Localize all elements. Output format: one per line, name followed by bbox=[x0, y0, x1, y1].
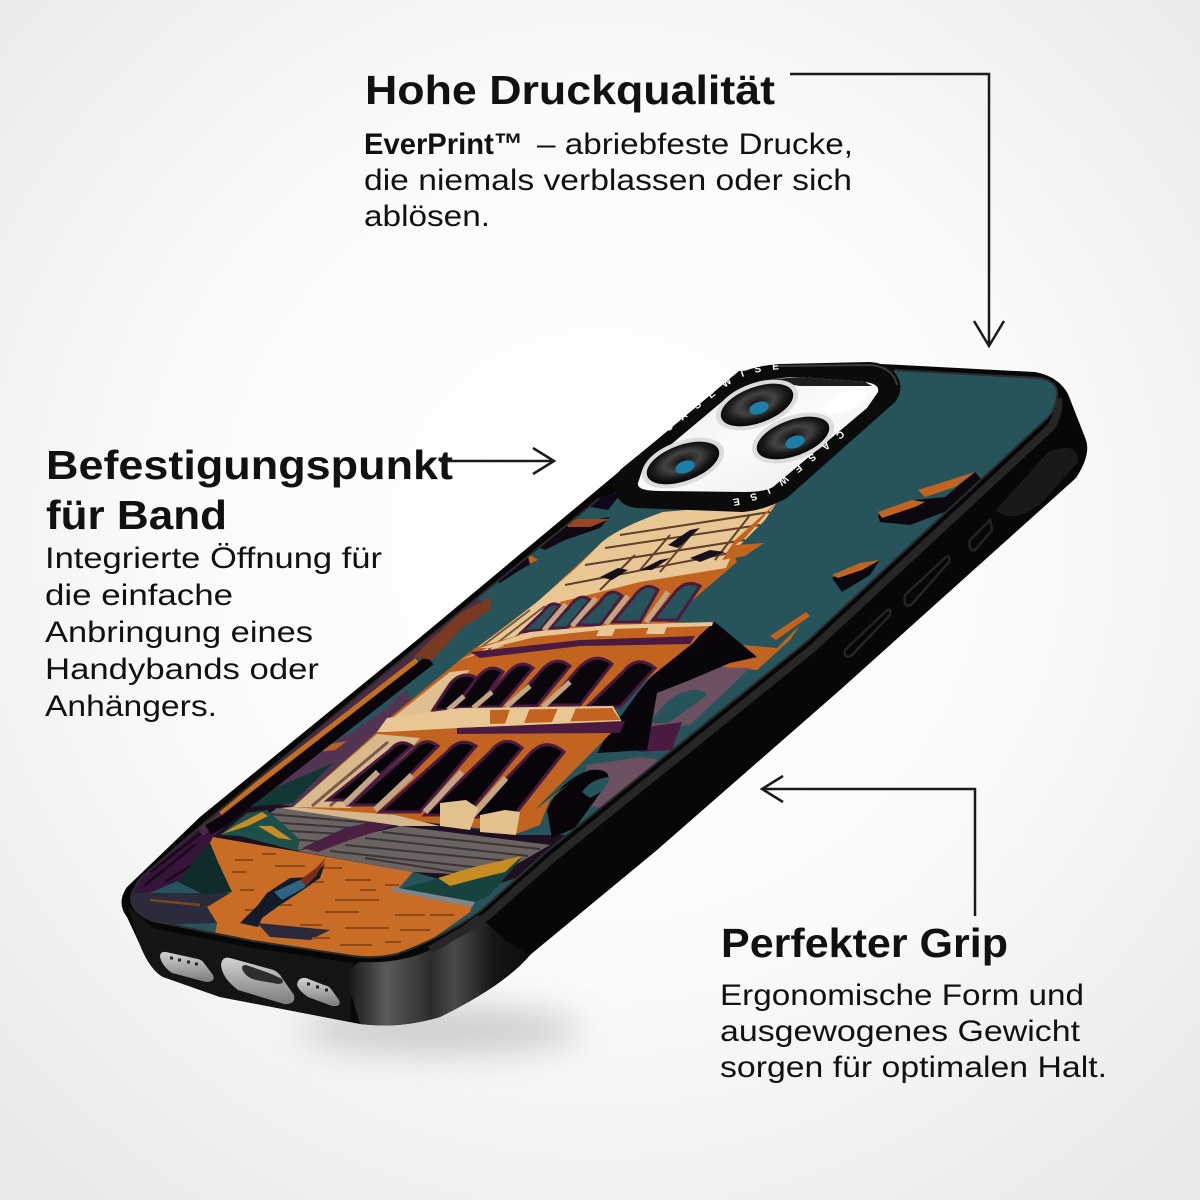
orange rods bbox=[770, 612, 810, 640]
tier four left tan wall bbox=[293, 734, 420, 808]
haze teal stripe bbox=[347, 700, 393, 733]
tier two tan columns bbox=[544, 592, 668, 630]
screen rim bbox=[132, 371, 1056, 956]
left planter bbox=[220, 810, 300, 851]
charging port opening bbox=[242, 965, 283, 984]
arrow: to grip edge bbox=[762, 776, 975, 916]
arrow: to attachment point bbox=[440, 448, 554, 474]
tier four left brown stripes bbox=[312, 742, 410, 806]
figure shadow bbox=[257, 923, 330, 940]
description: Handybands oder bbox=[45, 653, 319, 686]
description bbox=[364, 128, 853, 233]
left purple corner bbox=[132, 821, 232, 900]
dark foliage right bbox=[597, 622, 757, 753]
lens top bbox=[709, 370, 805, 440]
planter curb bbox=[392, 887, 475, 907]
upper ruin opening bbox=[650, 690, 706, 723]
brick lines bbox=[232, 854, 454, 945]
tier three columns bbox=[448, 682, 570, 710]
ground bbox=[207, 837, 473, 962]
band three tan blocks bbox=[505, 708, 576, 724]
case glossy corner bbox=[349, 915, 530, 1025]
heading: für Band bbox=[46, 492, 227, 538]
purple corner stripes bbox=[144, 814, 218, 886]
tier two left columns bbox=[472, 606, 555, 654]
lens left bbox=[635, 428, 731, 498]
callout: grip bbox=[720, 920, 1107, 1084]
tier four bases bbox=[440, 800, 520, 835]
ring wordmark lower: CASEWISE bbox=[732, 432, 844, 506]
speaker left holes bbox=[170, 958, 198, 964]
printed artwork: Colosseum bbox=[120, 360, 1080, 980]
description: Anbringung eines bbox=[45, 616, 313, 649]
description: die niemals verblassen oder sich bbox=[364, 164, 852, 197]
speaker right bbox=[297, 978, 340, 1006]
left pillar top bbox=[413, 597, 491, 660]
description: Anhängers. bbox=[45, 690, 217, 723]
description: EverPrint™ bbox=[364, 128, 523, 161]
cloud near ring bbox=[580, 487, 620, 510]
tier three plum line bbox=[470, 636, 695, 658]
flash glare bbox=[821, 385, 869, 419]
tier three left tan wall bbox=[390, 670, 470, 720]
case side rim bbox=[430, 398, 1058, 950]
description: die einfache bbox=[45, 579, 233, 612]
description: Ergonomische Form und bbox=[720, 979, 1084, 1012]
description: – abriebfeste Drucke, bbox=[537, 128, 853, 161]
Colosseum building bbox=[280, 502, 777, 835]
heading: Hohe Druckqualität bbox=[365, 67, 775, 113]
right cornice bbox=[722, 502, 777, 560]
description bbox=[45, 542, 382, 723]
charging port bbox=[221, 958, 294, 1004]
side buttons bbox=[845, 520, 992, 657]
upper mauve ruin bbox=[651, 667, 750, 726]
figure bbox=[240, 858, 326, 927]
callout: print quality bbox=[364, 67, 853, 233]
left orange stripe bbox=[220, 660, 417, 813]
cloud left lower bbox=[493, 555, 538, 583]
upper tier hatch bbox=[565, 512, 770, 590]
tier four arches bbox=[328, 741, 564, 817]
lower ruin opening bbox=[582, 777, 610, 798]
tier two arches bbox=[522, 583, 700, 632]
building silhouette bbox=[293, 502, 777, 832]
left planter flowers bbox=[222, 812, 292, 840]
dark green bush left bbox=[250, 763, 333, 807]
dark tree left bbox=[178, 843, 232, 895]
description: ausgewogenes Gewicht bbox=[720, 1015, 1081, 1048]
cloud left upper bbox=[537, 517, 610, 550]
band three orange bbox=[490, 708, 620, 724]
camera well bbox=[638, 377, 878, 492]
cloud right large bbox=[878, 472, 982, 525]
right orange slab bbox=[720, 625, 800, 670]
stairs debris bbox=[302, 820, 396, 852]
lower mauve ruin bbox=[584, 757, 659, 808]
right planter bbox=[400, 858, 522, 903]
right planter flowers bbox=[438, 856, 522, 886]
bottom ports bbox=[160, 952, 340, 1006]
haze orange cloud bbox=[322, 741, 347, 752]
shadow streak bbox=[150, 900, 200, 905]
speaker left bbox=[160, 952, 214, 982]
stairs left bbox=[262, 808, 372, 850]
cloud right small bbox=[832, 560, 880, 592]
orange wall low bbox=[513, 783, 570, 835]
side grip panel bbox=[996, 448, 1078, 516]
purple haze bbox=[262, 690, 412, 807]
band three bbox=[377, 706, 622, 732]
case lower face bbox=[127, 905, 353, 1022]
upper tier windows bbox=[600, 528, 725, 580]
well upper shadow bbox=[762, 377, 872, 386]
clouds bbox=[493, 472, 982, 592]
plum band bbox=[636, 722, 682, 752]
camera ring bbox=[615, 362, 900, 512]
sky bbox=[120, 360, 1080, 980]
screen edge plum strip bbox=[200, 600, 480, 832]
heading: Befestigungspunkt bbox=[46, 442, 453, 488]
arrow: to print surface bbox=[790, 74, 1004, 346]
description bbox=[720, 979, 1107, 1084]
left black band bbox=[208, 660, 430, 830]
heading bbox=[46, 442, 453, 538]
stair lines bbox=[268, 814, 540, 876]
description: sorgen für optimalen Halt. bbox=[720, 1051, 1107, 1084]
band two bbox=[460, 623, 713, 660]
band two tan blocks bbox=[480, 622, 713, 648]
description: Integrierte Öffnung für bbox=[45, 542, 382, 575]
tier three arches bbox=[433, 658, 655, 710]
ground shadow left bbox=[130, 893, 230, 925]
stairs right bbox=[297, 826, 550, 876]
speaker right holes bbox=[307, 984, 328, 990]
lens right bbox=[745, 403, 841, 473]
dark base under building bbox=[213, 804, 565, 884]
phone shadow bbox=[300, 1004, 580, 1056]
tier four left base bbox=[280, 807, 440, 826]
heading: Perfekter Grip bbox=[721, 920, 1008, 966]
phone case bbox=[122, 362, 1088, 1026]
tier two left tan wall bbox=[460, 600, 562, 660]
ring wordmark top: CASEWISE bbox=[668, 364, 779, 431]
description: ablösen. bbox=[364, 200, 490, 233]
camera module bbox=[616, 362, 900, 512]
tan upper tier bbox=[537, 502, 777, 602]
case body bbox=[122, 364, 1087, 1025]
callout: attachment point bbox=[45, 442, 453, 723]
lower ruin dark arch bbox=[547, 770, 609, 838]
band plum line bbox=[457, 721, 625, 734]
ring inner highlight bbox=[775, 365, 897, 385]
tier four lower columns bbox=[345, 772, 506, 815]
